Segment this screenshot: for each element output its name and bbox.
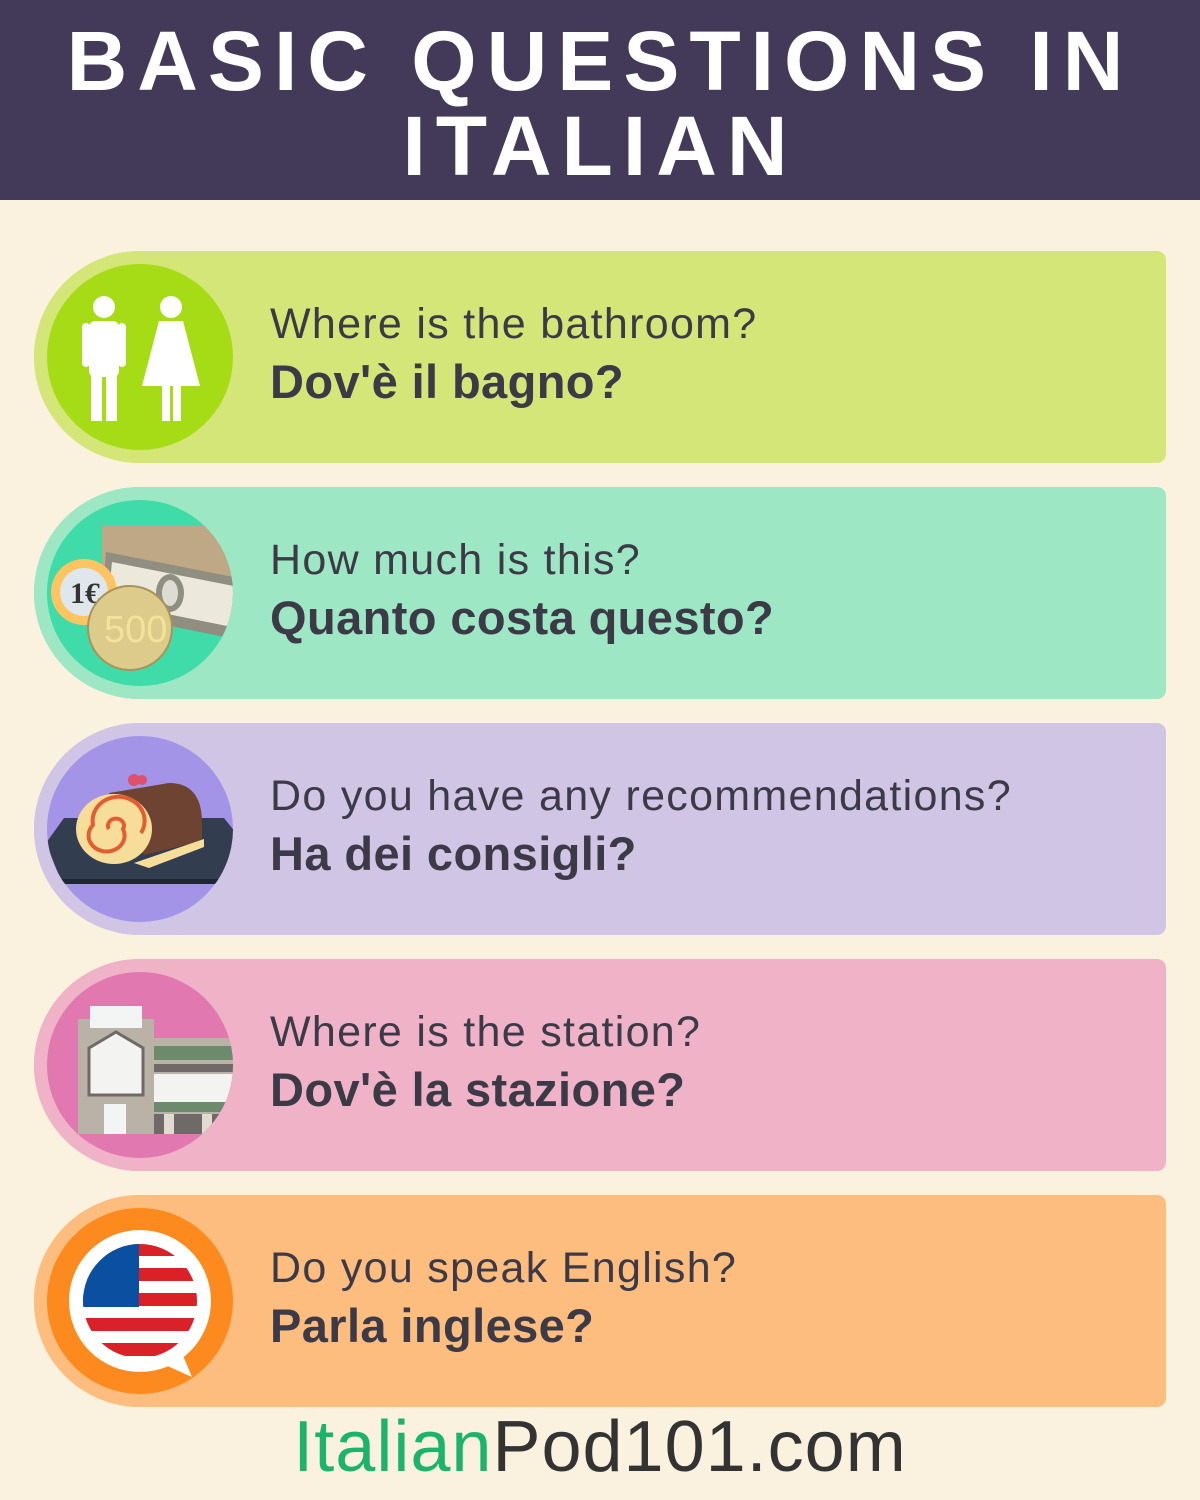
panel: price: [34, 487, 1166, 699]
panel: price: Quanto costa questo?: [270, 591, 774, 644]
panel: recommendations: Do you have any recommendations?: [270, 772, 1012, 820]
panel: bathroom: [34, 251, 1166, 463]
panel: english: Parla inglese?: [270, 1299, 594, 1352]
panel: recommendations: Ha dei consigli?: [270, 827, 637, 880]
icon: money: 500: [104, 609, 167, 651]
panel: station: Dov'è la stazione?: [270, 1063, 685, 1116]
footer logo: ItalianPod101.com: [293, 1407, 907, 1487]
icon: money: [34, 487, 233, 699]
panel: english: [34, 1195, 1166, 1407]
panel: station: [34, 959, 1166, 1171]
panel: english: Do you speak English?: [270, 1244, 737, 1292]
text: Where is the bathroom?: [270, 300, 758, 348]
icon: money: 1€: [70, 577, 100, 610]
panel: price: How much is this?: [270, 536, 641, 584]
icon: US flag speech bubble: [34, 1195, 233, 1407]
title: [0, 0, 1200, 200]
title: ITALIAN: [402, 99, 798, 193]
icon: station building: [34, 959, 233, 1171]
icon: restroom: [34, 251, 233, 463]
panel: station: Where is the station?: [270, 1008, 701, 1056]
panel: bathroom: Dov'è il bagno?: [270, 355, 624, 408]
panel: recommendations: [34, 723, 1166, 935]
title: BASIC QUESTIONS IN: [67, 14, 1133, 108]
icon: cake roll: [34, 723, 233, 935]
